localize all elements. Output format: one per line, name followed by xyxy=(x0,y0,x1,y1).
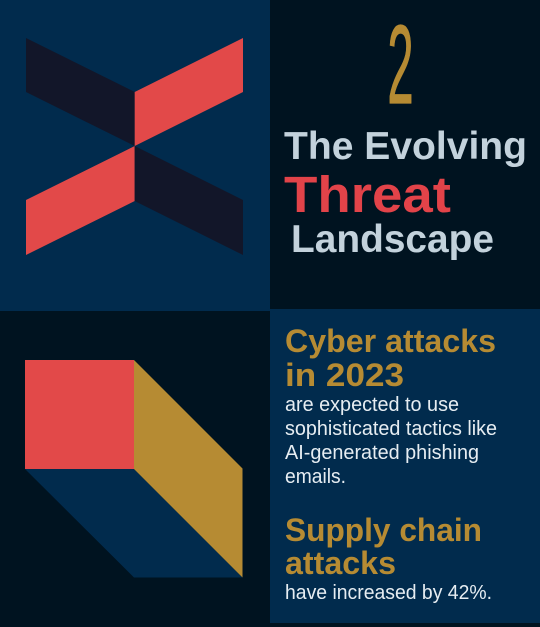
body text: have increased by 42%. xyxy=(285,582,492,604)
body text: sophisticated tactics like xyxy=(285,418,497,440)
heading: Cyber attacks xyxy=(285,323,496,359)
body text xyxy=(285,394,497,488)
body text: AI-generated phishing xyxy=(285,442,479,464)
icon: cube xyxy=(25,360,242,578)
panel: statistics xyxy=(270,309,540,623)
title line: Threat: Threat xyxy=(284,166,451,223)
panel: title: 2 xyxy=(388,3,414,127)
block: supply chain xyxy=(285,512,492,604)
panel: title xyxy=(284,3,527,261)
panel: top left xyxy=(0,0,270,311)
title line: The Evolving: The Evolving xyxy=(284,125,527,168)
icon: X shape xyxy=(26,38,243,255)
heading line two: in 2023 xyxy=(285,357,404,393)
heading: Supply chain xyxy=(285,512,482,548)
heading line two: attacks xyxy=(285,545,396,581)
block: cyber attacks xyxy=(285,323,497,488)
title line: Landscape: Landscape xyxy=(291,218,494,261)
body text: emails. xyxy=(285,466,346,488)
body text: are expected to use xyxy=(285,394,459,416)
